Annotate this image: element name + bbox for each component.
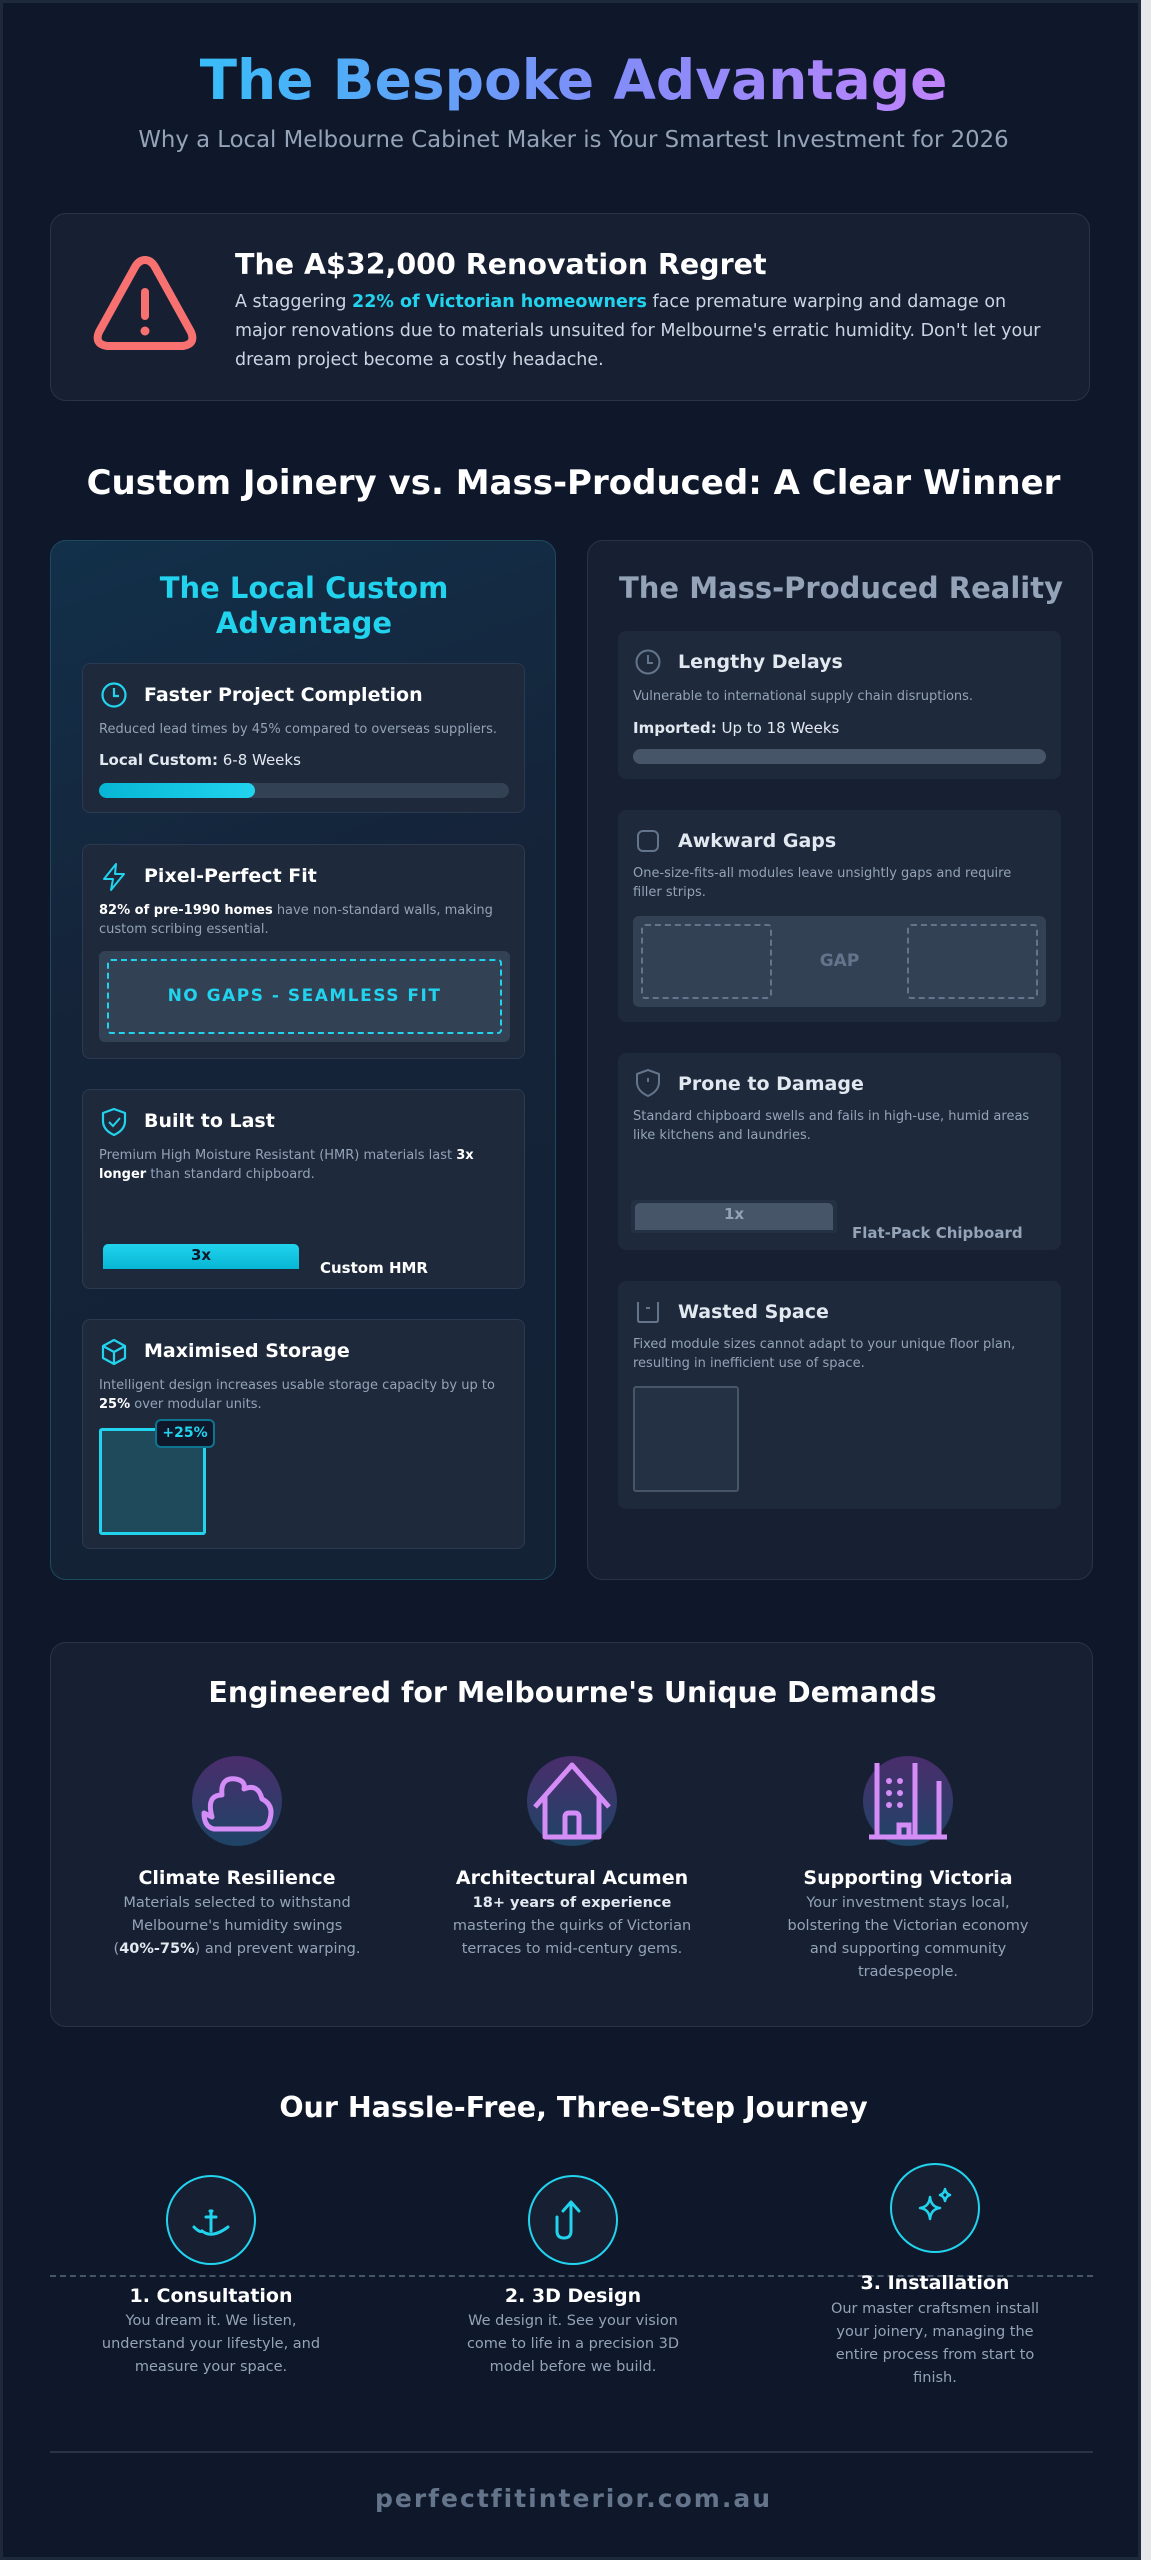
step: consultation: 1. Consultation <box>129 2285 292 2307</box>
wasted space diagram <box>633 1386 739 1492</box>
heading: Engineered for Melbourne's Unique Demands <box>208 1676 937 1709</box>
card: lengthy delays <box>618 631 1061 779</box>
step: installation: 3. Installation <box>861 2272 1009 2294</box>
bar chart: durability 1x: 1x <box>724 1205 744 1223</box>
card: pixel-perfect fit <box>82 844 525 1059</box>
panel: melbourne demands <box>50 1642 1093 2027</box>
icon: anchor circle <box>166 2175 256 2265</box>
card: lengthy delays: Vulnerable to international supply chain disruptions. <box>633 689 973 704</box>
subtitle: Why a Local Melbourne Cabinet Maker is Your Smartest Investment for 2026 <box>138 127 1009 153</box>
card: maximised storage <box>82 1319 525 1549</box>
card: wasted space <box>618 1281 1061 1509</box>
gap diagram: GAP <box>820 951 859 971</box>
card: pixel-perfect fit: Pixel-Perfect Fit <box>144 865 317 887</box>
card: wasted space: Fixed module sizes cannot adapt to your unique floor plan, resulting in inefficient use of space. <box>633 1337 1015 1371</box>
feature: climate resilience: Climate Resilience <box>138 1867 336 1889</box>
title: The Bespoke Advantage <box>200 48 947 112</box>
panel title <box>160 571 448 640</box>
card: awkward gaps: One-size-fits-all modules leave unsightly gaps and require filler strips. <box>633 866 1011 900</box>
icon: building <box>863 1756 953 1846</box>
card: maximised storage: Maximised Storage <box>144 1340 350 1362</box>
card: awkward gaps: Awkward Gaps <box>678 830 836 852</box>
icon: box <box>102 1338 126 1366</box>
card: lengthy delays: Imported: Up to 18 Weeks <box>633 719 839 737</box>
feature: supporting victoria: Supporting Victoria <box>803 1867 1013 1889</box>
seamless fit diagram <box>99 951 510 1042</box>
section heading: journey: Our Hassle-Free, Three-Step Journey <box>279 2091 868 2124</box>
body text: A staggering 22% of Victorian homeowners face premature warping and damage on major renovations due to materials unsuited for Melbourne's erratic humidity. Don't let your dream project become a costly headache. <box>235 292 1040 370</box>
feature: climate resilience: Materials selected to withstand Melbourne's humidity swings (40%-75%) and prevent warping. <box>114 1895 360 1957</box>
step: installation: Our master craftsmen install your joinery, managing the entire process from start to finish. <box>831 2301 1039 2386</box>
section heading: Custom Joinery vs. Mass-Produced: A Clear Winner <box>87 463 1060 503</box>
icon: sparkles circle <box>890 2163 980 2253</box>
panel title: The Mass-Produced Reality <box>619 571 1063 605</box>
icon: tray <box>637 1302 659 1323</box>
step: 3d design <box>467 2175 679 2375</box>
bar chart: durability 3x <box>100 1241 302 1271</box>
card: faster completion: Local Custom: 6-8 Weeks <box>99 751 301 769</box>
step: consultation: You dream it. We listen, understand your lifestyle, and measure your space. <box>102 2313 320 2375</box>
bar chart: lead time <box>99 783 509 798</box>
card: wasted space: Wasted Space <box>678 1301 829 1323</box>
panel: mass-produced reality <box>587 540 1093 1580</box>
icon: warning triangle <box>94 256 196 350</box>
footer url: perfectfitinterior.com.au <box>375 2484 772 2513</box>
panel: renovation regret alert <box>50 213 1090 401</box>
feature: supporting victoria: Your investment stays local, bolstering the Victorian economy and supporting community tradespeople. <box>787 1895 1029 1980</box>
card: prone to damage: Prone to Damage <box>678 1073 864 1095</box>
footer divider <box>50 2451 1093 2453</box>
bar chart: durability 3x: 3x <box>191 1246 211 1264</box>
icon: cloud <box>192 1756 282 1846</box>
card: faster completion <box>82 663 525 813</box>
icon: clock <box>101 682 127 708</box>
heading: The A$32,000 Renovation Regret <box>235 248 767 281</box>
icon: clock grey <box>636 650 660 674</box>
icon: house <box>527 1756 617 1846</box>
bar chart: durability 1x <box>631 1200 837 1233</box>
card: built to last: Custom HMR <box>320 1259 428 1277</box>
icon: arrow circle <box>528 2175 618 2265</box>
card: awkward gaps <box>618 810 1061 1022</box>
card: lengthy delays: Lengthy Delays <box>678 651 843 673</box>
icon: shield alert <box>636 1069 660 1097</box>
card: faster completion: Faster Project Completion <box>144 684 423 706</box>
seamless fit diagram: NO GAPS - SEAMLESS FIT <box>168 986 441 1006</box>
feature: climate resilience <box>114 1756 360 1957</box>
card: built to last: Built to Last <box>144 1110 275 1132</box>
feature: architectural acumen: Architectural Acumen <box>456 1867 688 1889</box>
badge: +25%: +25% <box>162 1425 208 1441</box>
bar chart: imported lead time <box>633 749 1046 764</box>
gap diagram <box>633 916 1046 1007</box>
card: maximised storage: Intelligent design increases usable storage capacity by up to 25% over modular units. <box>99 1378 495 1412</box>
step: 3d design: We design it. See your vision come to life in a precision 3D model before we build. <box>467 2313 679 2375</box>
timeline dashed line <box>50 2275 1093 2277</box>
step: consultation <box>102 2175 320 2375</box>
badge: +25% <box>155 1419 215 1448</box>
feature: architectural acumen <box>453 1756 691 1957</box>
feature: architectural acumen: 18+ years of experience mastering the quirks of Victorian terraces to mid-century gems. <box>453 1895 691 1957</box>
icon: shield check <box>102 1108 126 1136</box>
panel: local custom advantage <box>50 540 556 1580</box>
card: faster completion: Reduced lead times by 45% compared to overseas suppliers. <box>99 722 497 737</box>
card: built to last: Premium High Moisture Resistant (HMR) materials last 3x longer than standard chipboard. <box>99 1148 474 1182</box>
panel title: Advantage <box>216 606 392 640</box>
card: prone to damage <box>618 1053 1061 1250</box>
panel title: The Local Custom <box>160 571 448 605</box>
storage diagram <box>99 1428 206 1535</box>
step: 3d design: 2. 3D Design <box>505 2285 641 2307</box>
step: installation <box>831 2163 1039 2386</box>
icon: square <box>637 830 659 852</box>
card: built to last <box>82 1089 525 1289</box>
card: pixel-perfect fit: 82% of pre-1990 homes have non-standard walls, making custom scribing essential. <box>99 903 493 937</box>
card: prone to damage: Flat-Pack Chipboard <box>852 1224 1023 1242</box>
feature: supporting victoria <box>787 1756 1029 1980</box>
card: prone to damage: Standard chipboard swells and fails in high-use, humid areas like kitchens and laundries. <box>633 1109 1029 1143</box>
icon: lightning <box>103 863 125 891</box>
